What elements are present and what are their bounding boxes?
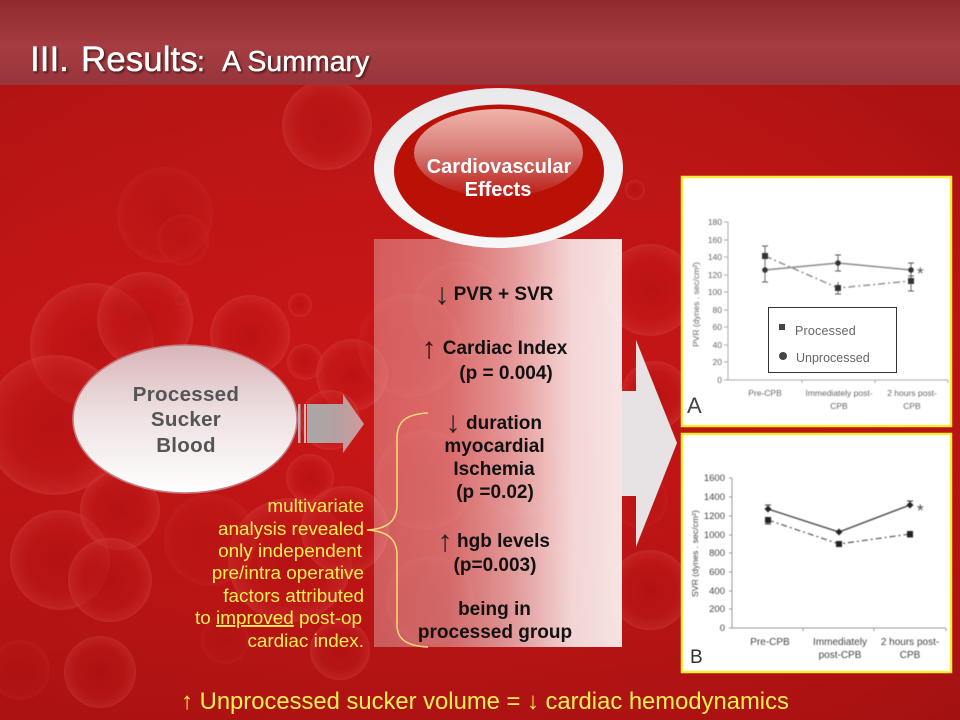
chart A: CPB [903,401,921,411]
multivariate note: pre/intra operative [212,563,364,584]
results list: (p = 0.004) [459,363,553,384]
multivariate note: analysis revealed [218,519,364,540]
chart B: 1000 [704,530,725,541]
results list: (p=0.003) [454,555,536,576]
chart A legend: Unprocessed [796,351,870,365]
title: A Summary [222,46,370,78]
chart A: 2 hours post- [887,388,937,398]
chart B: 800 [709,548,725,559]
cardiovascular effects badge: Effects [465,179,531,201]
small arrow [298,394,364,453]
processed sucker blood oval: Processed [133,383,239,406]
multivariate note: factors attributed [223,586,364,607]
results list: hgb levels [457,531,550,552]
chart A legend: Processed [795,324,856,338]
big arrow to charts [622,340,677,547]
chart A: 100 [708,287,722,297]
results list: Cardiac Index [443,338,568,359]
chart B: post-CPB [819,650,862,661]
results list: Ischemia [453,459,535,480]
chart B: 1400 [704,492,725,503]
multivariate note: multivariate [267,496,364,517]
chart B: 600 [709,567,725,578]
results list: myocardial [444,436,545,457]
results list: PVR + SVR [454,284,554,305]
multivariate note: only independent [218,541,363,562]
title: III. [30,40,69,79]
title: Results [81,40,198,79]
chart B: * [917,501,924,520]
chart A: 140 [708,252,722,262]
chart A: * [917,264,924,283]
results list: processed group [418,622,572,643]
results list [418,278,572,643]
title: : [197,46,205,78]
cardiovascular effects badge [374,88,623,248]
chart A: 180 [708,217,722,227]
results list: (p =0.02) [456,482,534,503]
processed sucker blood oval: Blood [156,434,216,457]
multivariate note: to improved post-op [195,608,362,629]
chart B: Immediately [813,637,867,648]
chart B: 400 [709,586,725,597]
chart B: CPB [900,650,921,661]
processed sucker blood oval: Sucker [151,408,221,431]
results list: ↑ [422,332,436,365]
chart A: A [687,393,702,418]
chart B: SVR (dynes . sec/cm²) [690,510,700,597]
chart A: PVR (dynes . sec/cm²) [691,262,701,347]
chart A: 60 [713,322,722,332]
results list: duration [466,413,542,434]
chart A: 120 [708,270,722,280]
results list: ↓ [434,278,450,311]
chart A [682,177,951,426]
chart B: 2 hours post- [881,637,939,648]
chart B: 200 [709,604,725,615]
title band [0,0,960,85]
chart A: Pre-CPB [748,388,782,398]
chart B: Pre-CPB [750,637,790,648]
cardiovascular effects badge: Cardiovascular [427,156,571,178]
processed sucker blood oval [73,345,297,493]
chart A: 40 [713,340,722,350]
chart A: CPB [830,401,848,411]
results list: ↓ [446,406,460,439]
chart B: 1200 [704,511,725,522]
chart A: 80 [713,305,722,315]
chart A: Immediately post- [805,388,873,398]
title [30,40,370,79]
chart A: 0 [717,375,722,385]
chart A: 20 [713,357,722,367]
chart A legend [768,308,896,372]
center results panel [374,239,622,647]
chart A: 160 [708,235,722,245]
bottom conclusion: ↑ Unprocessed sucker volume = ↓ cardiac hemodynamics [181,688,789,715]
multivariate note [195,496,364,652]
chart B [682,434,951,672]
results list: ↑ [438,525,452,558]
chart B: 1600 [704,473,725,484]
multivariate note: cardiac index. [247,631,364,652]
chart B: B [690,647,703,668]
chart B: 0 [720,623,725,634]
brace [367,413,428,647]
results list: being in [458,599,531,620]
